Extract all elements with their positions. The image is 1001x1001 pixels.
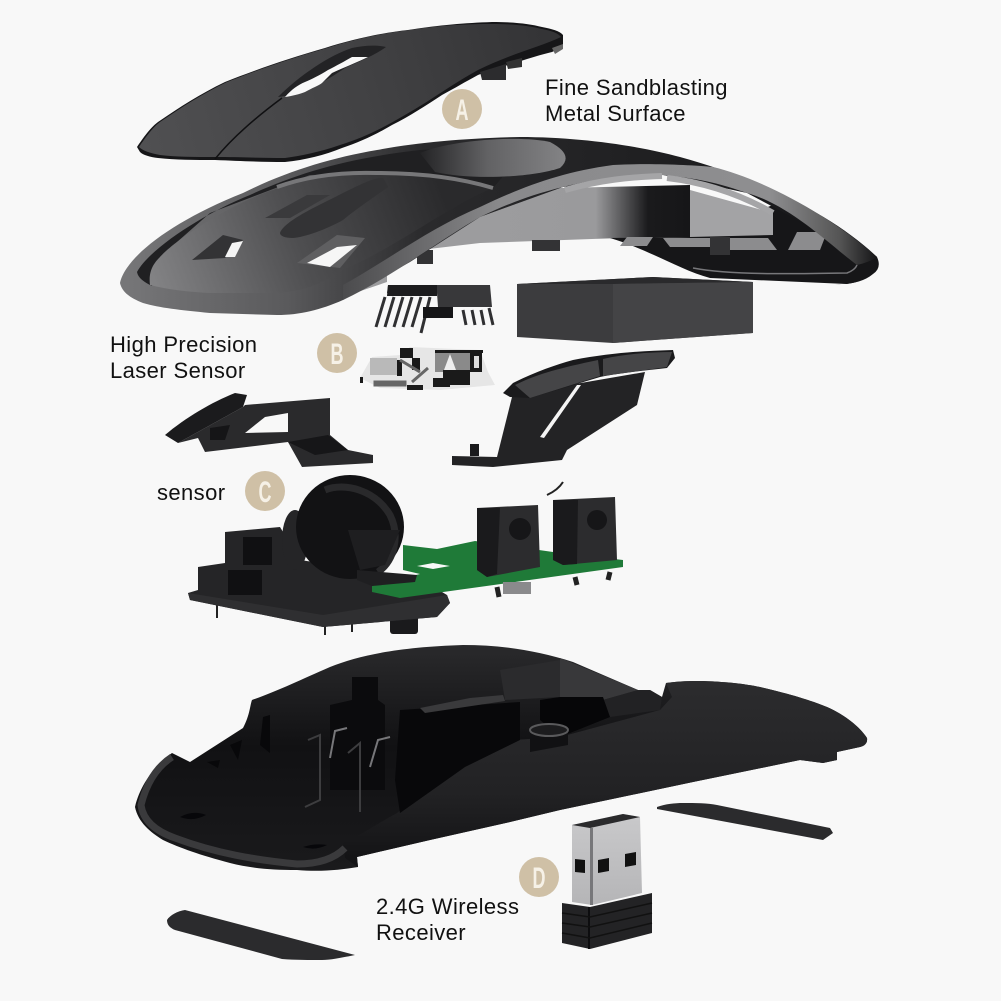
floor holes [180, 813, 327, 849]
mount screw [390, 612, 418, 634]
solder pins [497, 572, 610, 597]
switch 2 dark side [553, 500, 578, 565]
pcb white gap [417, 563, 450, 569]
rib highlights [305, 735, 360, 812]
upper block [500, 660, 560, 700]
left button bracket [165, 393, 373, 467]
laser sensor module [360, 347, 495, 390]
back wall [560, 658, 638, 700]
left notches [207, 715, 270, 768]
badge D [519, 857, 559, 897]
label: wireless receiver: Receiver [376, 920, 466, 945]
shell underside [610, 205, 877, 284]
sensor window surround [192, 235, 243, 260]
interior tower [395, 702, 520, 813]
wheel highlight [325, 487, 395, 572]
badge C [245, 471, 285, 511]
left foot pad [167, 910, 355, 960]
internal light pieces [620, 232, 827, 250]
base plate and blocks [188, 527, 450, 627]
shell floor [150, 173, 493, 293]
stray curve [547, 482, 563, 495]
right button bracket [452, 350, 675, 467]
scroll hub [282, 510, 308, 570]
posts [417, 237, 730, 264]
label: fine sandblasting: Metal Surface [545, 101, 686, 126]
rim highlight arc [277, 173, 493, 188]
green pcb [372, 541, 623, 598]
label: sensor: sensor [157, 480, 225, 505]
dome recess [420, 139, 566, 177]
top metal cover [137, 22, 563, 162]
long slot [280, 178, 388, 238]
outer surface [343, 681, 867, 867]
light inner strip right [667, 178, 773, 213]
base plate pins [217, 600, 352, 635]
underside line [693, 265, 857, 274]
base plate edge [188, 593, 450, 627]
scroll wheel [296, 475, 404, 579]
label: high precision laser sensor: Laser Sensor [110, 358, 246, 383]
wheel mount [357, 570, 417, 586]
label: high precision laser sensor: High Precision [110, 332, 257, 357]
right back block [603, 690, 662, 717]
switch 1 dark side [477, 508, 500, 577]
switch 2 [553, 497, 617, 565]
window surround [297, 235, 365, 268]
switch 2 button [587, 510, 607, 530]
switch 1 button [509, 518, 531, 540]
label: wireless receiver: 2.4G Wireless [376, 894, 519, 919]
shell outer body [120, 137, 879, 315]
cylinder top [530, 724, 568, 736]
cylinder [530, 730, 568, 752]
badge A [442, 89, 482, 129]
tall post [330, 677, 385, 790]
clip highlights [330, 728, 390, 767]
white window [307, 245, 357, 267]
left rim [141, 757, 345, 864]
badge B [317, 333, 357, 373]
secondary slot [265, 195, 330, 218]
upper shell [120, 137, 879, 315]
USB receiver [562, 814, 652, 949]
right foot pad [657, 803, 833, 840]
grey pin block [503, 582, 531, 594]
battery block [517, 277, 753, 343]
internal block [690, 190, 773, 237]
lower shell silhouette [135, 645, 867, 871]
tower rim [420, 695, 505, 713]
badge D: D [532, 862, 546, 895]
sensor window [225, 241, 243, 257]
inner dark wall [137, 145, 530, 286]
chip with pins [376, 285, 493, 333]
light inner strip [565, 176, 662, 190]
switch 1 [477, 505, 540, 577]
badge C: C [258, 476, 272, 509]
badge B: B [330, 338, 344, 371]
grey front band [343, 164, 877, 300]
lower shell [135, 645, 867, 871]
wheel cap [348, 530, 400, 570]
circuit board with scroll wheel [188, 475, 623, 635]
interior wall [340, 185, 690, 298]
block recess [228, 537, 272, 595]
badge A: A [456, 94, 468, 127]
label: fine sandblasting: Fine Sandblasting [545, 75, 728, 100]
black recess [540, 697, 610, 737]
